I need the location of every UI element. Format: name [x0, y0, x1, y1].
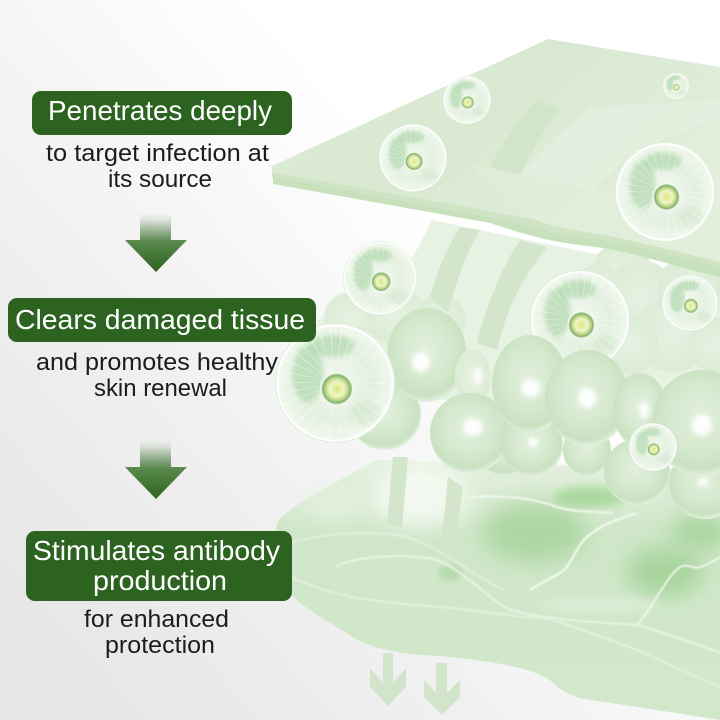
microbe: upper left cluster: [343, 241, 417, 315]
step 3 description: protection: [105, 632, 215, 659]
microbe: cluster right: [662, 275, 718, 331]
step 3 heading pill: Stimulates antibody: [33, 535, 280, 566]
step 2 heading pill: [8, 298, 316, 342]
back cell mass: [318, 220, 720, 400]
sheet beam stripes: [490, 100, 560, 175]
sphere highlights: [412, 352, 712, 486]
step 2 description: [36, 349, 279, 402]
step 1 description: its source: [108, 166, 212, 193]
step 2 heading pill: Clears damaged tissue: [15, 304, 305, 335]
microbe: cluster centre: [530, 270, 630, 370]
step 1 description: [46, 140, 269, 193]
step 3 heading pill: production: [93, 565, 227, 596]
microbe: sheet upper: [443, 76, 491, 124]
step 1 heading pill: [32, 91, 292, 135]
step 1 description: to target infection at: [46, 140, 269, 167]
step 2 description: and promotes healthy: [36, 349, 279, 376]
step 3 heading pill: [26, 531, 292, 601]
arrow: step 1 to 2: [125, 213, 187, 272]
light beams: lower segment: [387, 457, 463, 545]
step 2: [8, 298, 316, 402]
skin layer: bottom wavy tissue: [276, 460, 720, 720]
microbe: sheet top small: [663, 73, 689, 99]
step 1 heading pill: Penetrates deeply: [48, 95, 272, 126]
step 2 description: skin renewal: [94, 375, 227, 402]
step 1: [32, 91, 292, 193]
light beams: middle segment: [430, 227, 547, 350]
illustration: layered skin: [272, 39, 720, 720]
step 3 description: [84, 606, 229, 659]
microbe: sheet large right: [615, 142, 715, 242]
step 3: [26, 531, 292, 659]
step 3 description: for enhanced: [84, 606, 229, 633]
cell spheres row: [349, 308, 720, 519]
pale arrow: right: [424, 663, 460, 715]
top membrane sheet: [272, 39, 720, 277]
microbe: small on spheres: [629, 423, 677, 471]
microbe: sheet left: [379, 124, 447, 192]
pale arrow: left: [370, 653, 406, 706]
microbe: large left: [275, 323, 395, 443]
arrow: step 2 to 3: [125, 440, 187, 499]
